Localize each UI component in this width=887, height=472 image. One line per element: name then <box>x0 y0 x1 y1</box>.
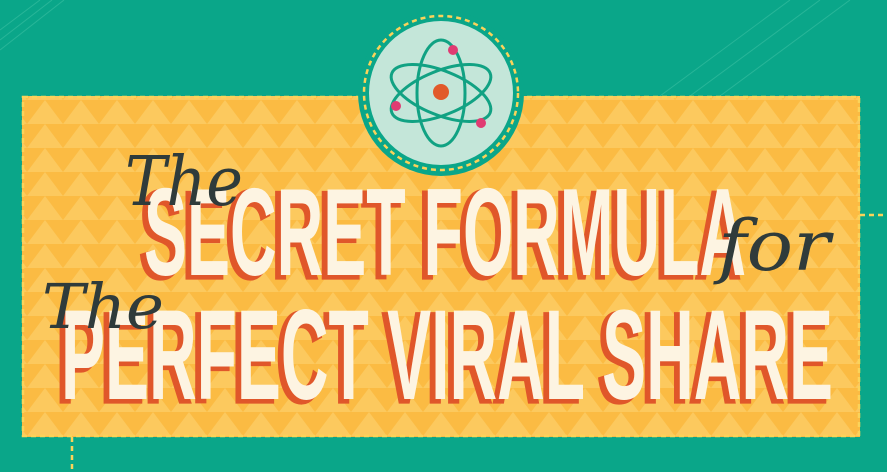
script: for: for <box>712 205 834 287</box>
title: SECRET FORMULA: SECRET FORMULA <box>144 163 746 303</box>
script: The (top): The <box>125 143 243 222</box>
connector: bottom dashed line <box>71 437 73 472</box>
script: The (bottom): The <box>42 270 164 343</box>
connector: right dashed line <box>860 214 887 216</box>
icon: atom badge <box>358 10 524 176</box>
panel: yellow title board <box>22 96 860 437</box>
title: SECRET FORMULA: SECRET FORMULA <box>139 167 741 306</box>
